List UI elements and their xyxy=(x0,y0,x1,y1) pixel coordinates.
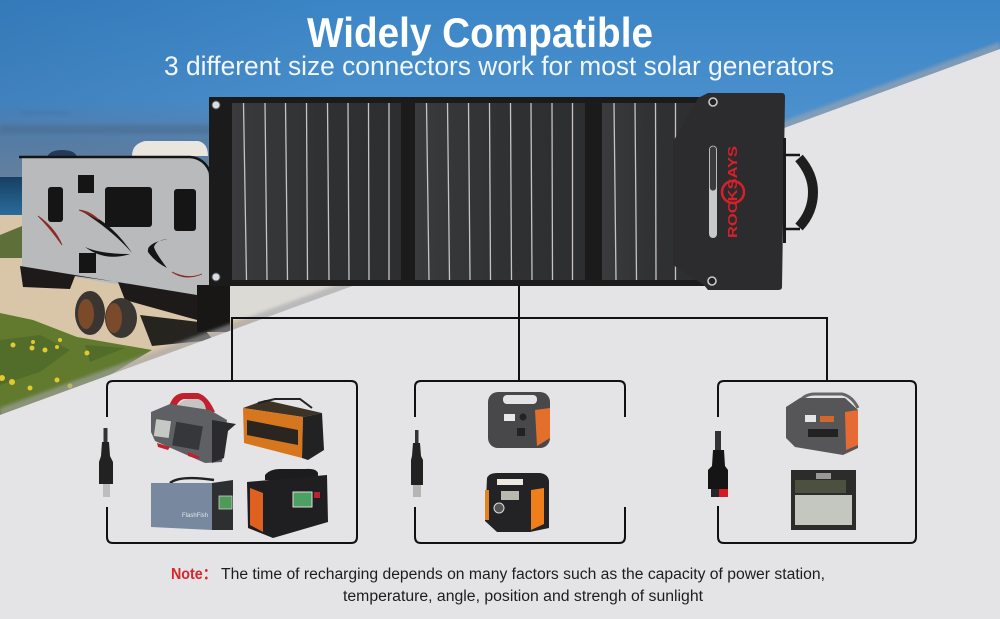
icon: DC plug xyxy=(99,428,113,497)
connector lines xyxy=(232,285,827,380)
box 1 xyxy=(99,381,357,543)
note: first line: Note： xyxy=(171,566,217,583)
panel cell: left xyxy=(232,103,401,280)
panel flap: ROCKSAYS xyxy=(725,146,740,238)
device: blue power station: FlashFish xyxy=(182,513,208,519)
box 2 xyxy=(411,381,625,543)
icon: Anderson plug xyxy=(708,431,728,497)
box 3 xyxy=(708,381,916,543)
device: orange power station xyxy=(243,399,324,460)
background: sky and beach photo xyxy=(0,0,1000,420)
device: grey and orange power station xyxy=(488,392,550,448)
device: grey and red power station xyxy=(151,393,236,463)
text: The time of recharging depends on many factors such as the capacity of power station, xyxy=(221,566,825,583)
device: grey and orange power station xyxy=(786,394,858,455)
caravan xyxy=(19,141,230,346)
handle xyxy=(783,138,813,243)
subtitle: 3 different size connectors work for most solar generators xyxy=(164,51,834,81)
title: Widely Compatible xyxy=(307,9,653,56)
panel cell: middle xyxy=(415,103,585,280)
device: black and orange power station xyxy=(485,473,549,532)
note: second line: temperature, angle, position and strengh of sunlight xyxy=(343,588,704,605)
panel cell: right xyxy=(602,103,702,280)
panel grommets xyxy=(212,101,220,281)
panel flap xyxy=(673,93,785,290)
device: black and orange power station xyxy=(247,469,328,538)
solar panel xyxy=(209,93,813,290)
icon: DC plug xyxy=(411,430,423,497)
device: blue power station xyxy=(151,478,233,530)
device: Goal Zero power station xyxy=(791,470,856,530)
